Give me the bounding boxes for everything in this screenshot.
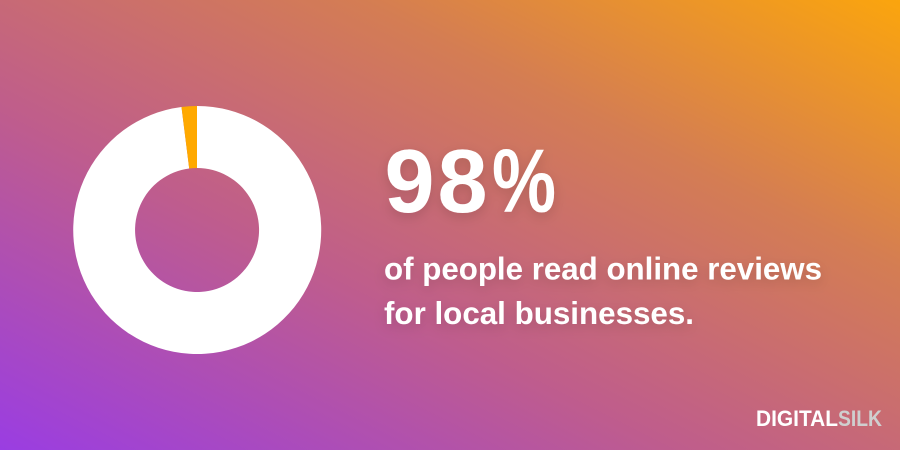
donut segment: 2% orange: [182, 106, 197, 168]
description text: [384, 250, 822, 331]
logo: Digital Silk: SILK: [838, 406, 882, 431]
description text: for local businesses.: [384, 295, 694, 331]
logo: Digital Silk: DIGITAL: [756, 406, 838, 431]
statistic: 98%: %: [492, 132, 556, 232]
donut chart: 98 percent: [73, 106, 321, 354]
statistic: 98%: [384, 132, 556, 232]
description text: of people read online reviews: [384, 250, 822, 286]
donut segment: 98% white: [73, 106, 321, 354]
statistic: 98%: 98: [384, 132, 491, 232]
logo: Digital Silk: [756, 406, 882, 431]
